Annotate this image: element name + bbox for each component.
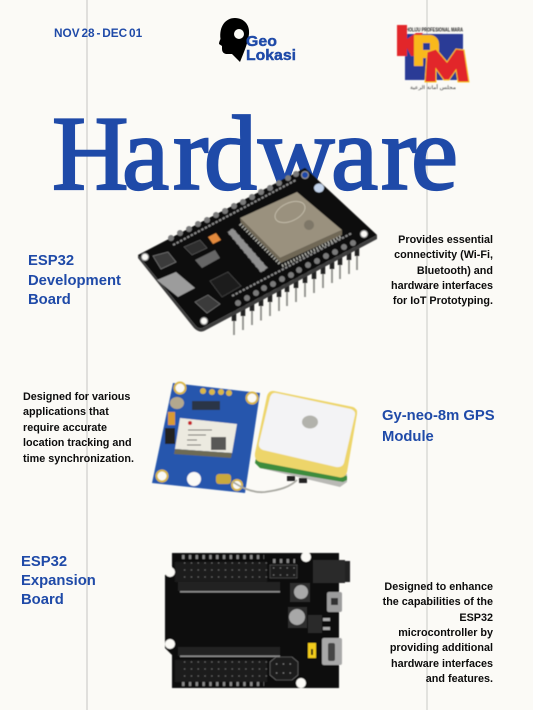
board xyxy=(138,168,377,328)
regulator xyxy=(308,615,322,633)
text: expansion board description: providing additional xyxy=(390,642,493,654)
text: GPS description: Designed for various xyxy=(23,391,130,403)
logo: Geo Lokasi: Lokasi xyxy=(246,47,296,64)
logo: Geo Lokasi: Geo xyxy=(246,33,277,50)
pin row xyxy=(234,248,357,335)
text: expansion board description: Designed to enhance xyxy=(384,581,493,593)
text: expansion board description xyxy=(383,581,493,685)
image: ESP32 development board xyxy=(138,168,377,335)
text: expansion board description: and features. xyxy=(426,673,493,685)
logo: HPM: مجلس أمانة الرعية xyxy=(410,83,456,91)
text: ESP32 description: Provides essential xyxy=(398,234,493,246)
text: GPS description xyxy=(23,391,134,465)
text: ESP32 description: connectivity (Wi-Fi, xyxy=(394,249,493,261)
label: ESP32 Expansion Board xyxy=(21,554,96,608)
label: ESP32 Development Board xyxy=(28,253,121,308)
label: ESP32 Development Board: Development xyxy=(28,273,121,289)
label: ESP32 Expansion Board: ESP32 xyxy=(21,554,67,570)
label: ESP32 Development Board: Board xyxy=(28,292,71,308)
capacitors xyxy=(290,583,310,602)
gps board xyxy=(152,383,260,493)
top marker labels xyxy=(182,557,264,684)
image: ESP32 expansion board xyxy=(165,552,350,688)
text: GPS description: time synchronization. xyxy=(23,453,134,465)
header pads bottom xyxy=(235,240,356,306)
text: ESP32 description xyxy=(391,234,493,307)
antenna xyxy=(260,458,347,487)
date label: NOV 28 - DEC 01 xyxy=(54,26,143,40)
text: expansion board description: the capabilities of the xyxy=(383,596,493,608)
connector xyxy=(216,474,231,484)
label: GPS module: Module xyxy=(382,429,434,445)
esp module xyxy=(240,192,342,258)
text: expansion board description: ESP32 xyxy=(459,612,493,624)
text: GPS description: applications that xyxy=(23,406,109,418)
logo: HPM: HOLIJU PROFESIONAL MARA xyxy=(406,28,463,34)
ublox chip xyxy=(175,418,237,453)
label: ESP32 Development Board: ESP32 xyxy=(28,253,74,269)
label: ESP32 Expansion Board: Expansion xyxy=(21,573,96,589)
text: ESP32 description: for IoT Prototyping. xyxy=(393,295,493,307)
logo: Geo Lokasi xyxy=(219,18,296,64)
text: ESP32 description: hardware interfaces xyxy=(391,280,493,292)
title: Hardware xyxy=(52,95,458,212)
mounting holes xyxy=(142,254,148,260)
text: expansion board description: hardware interfaces xyxy=(391,658,493,670)
label: ESP32 Expansion Board: Board xyxy=(21,592,64,608)
label: GPS module xyxy=(382,408,495,445)
image: GPS module xyxy=(152,382,357,493)
logo: HPM xyxy=(397,25,469,91)
text: expansion board description: microcontroller by xyxy=(398,627,493,639)
usb ports xyxy=(327,592,342,612)
pin header areas xyxy=(175,562,267,582)
text: GPS description: require accurate xyxy=(23,422,107,434)
header pads top xyxy=(168,171,299,241)
text: GPS description: location tracking and xyxy=(23,437,132,449)
text: ESP32 description: Bluetooth) and xyxy=(417,265,493,277)
label: GPS module: Gy-neo-8m GPS xyxy=(382,408,495,424)
silkscreen labels xyxy=(173,180,352,296)
usb + buttons + chips xyxy=(157,272,195,297)
yellow jumper xyxy=(308,643,316,658)
